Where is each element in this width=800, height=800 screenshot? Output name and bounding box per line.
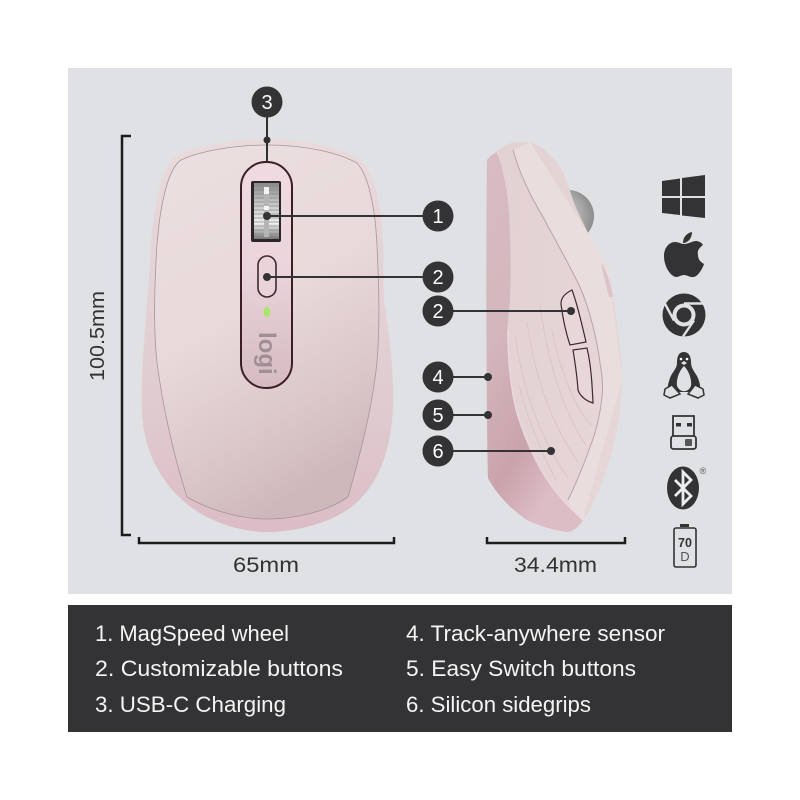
callout 6 xyxy=(422,436,555,466)
customizable top button xyxy=(258,256,276,297)
status LED xyxy=(264,307,270,317)
icon: Chrome xyxy=(662,294,706,336)
callout 5: 5 xyxy=(432,405,444,427)
panel: feature legend background xyxy=(68,605,732,732)
legend: left column xyxy=(95,621,343,717)
callout 1 xyxy=(263,200,454,232)
dimension: width xyxy=(139,537,394,577)
callout 2 top button: 2 xyxy=(432,267,444,289)
top edge button xyxy=(601,262,613,297)
icon: Bluetooth xyxy=(667,466,707,510)
icon: Linux penguin xyxy=(664,352,704,398)
callout 6: 6 xyxy=(432,441,444,463)
legend: left column: 2. Customizable buttons xyxy=(95,656,343,681)
mouse: top view xyxy=(142,139,393,532)
icon: battery 70 D: D xyxy=(680,549,690,564)
icon: battery 70 D: 70 xyxy=(678,536,692,550)
legend: left column: 1. MagSpeed wheel xyxy=(95,621,289,646)
depth label: 34.4mm xyxy=(514,554,597,577)
mouse: side view xyxy=(486,142,622,532)
callout 2 top button xyxy=(263,262,454,292)
side buttons xyxy=(561,290,593,403)
logi logo: logi xyxy=(253,332,280,375)
callout 3: 3 xyxy=(261,92,273,114)
legend: right column xyxy=(406,621,665,717)
legend: right column: 6. Silicon sidegrips xyxy=(406,692,591,717)
icon: Apple xyxy=(664,232,704,277)
icon: Bluetooth: ® xyxy=(700,466,707,476)
scroll wheel protruding xyxy=(542,190,594,242)
width label: 65mm xyxy=(233,554,299,577)
scroll and button strip xyxy=(241,162,292,388)
callout 5 xyxy=(422,400,492,430)
MagSpeed wheel xyxy=(251,181,281,242)
height label: 100.5mm xyxy=(86,291,109,381)
panel: product diagram background xyxy=(68,68,732,594)
legend: left column: 3. USB-C Charging xyxy=(95,692,286,717)
icon: USB receiver xyxy=(671,416,696,449)
dimension: depth xyxy=(487,537,625,577)
callout 2 side button xyxy=(422,296,575,326)
legend: right column: 5. Easy Switch buttons xyxy=(406,656,636,681)
dimension: height xyxy=(86,136,131,535)
icon: battery 70 D xyxy=(674,524,696,567)
callout 2 side button: 2 xyxy=(432,301,444,323)
legend: right column: 4. Track-anywhere sensor xyxy=(406,621,665,646)
callout 3 xyxy=(252,86,282,162)
icon: Windows xyxy=(662,175,705,218)
callout 4 xyxy=(422,362,492,392)
callout 1: 1 xyxy=(432,206,444,228)
callout 4: 4 xyxy=(432,367,444,389)
